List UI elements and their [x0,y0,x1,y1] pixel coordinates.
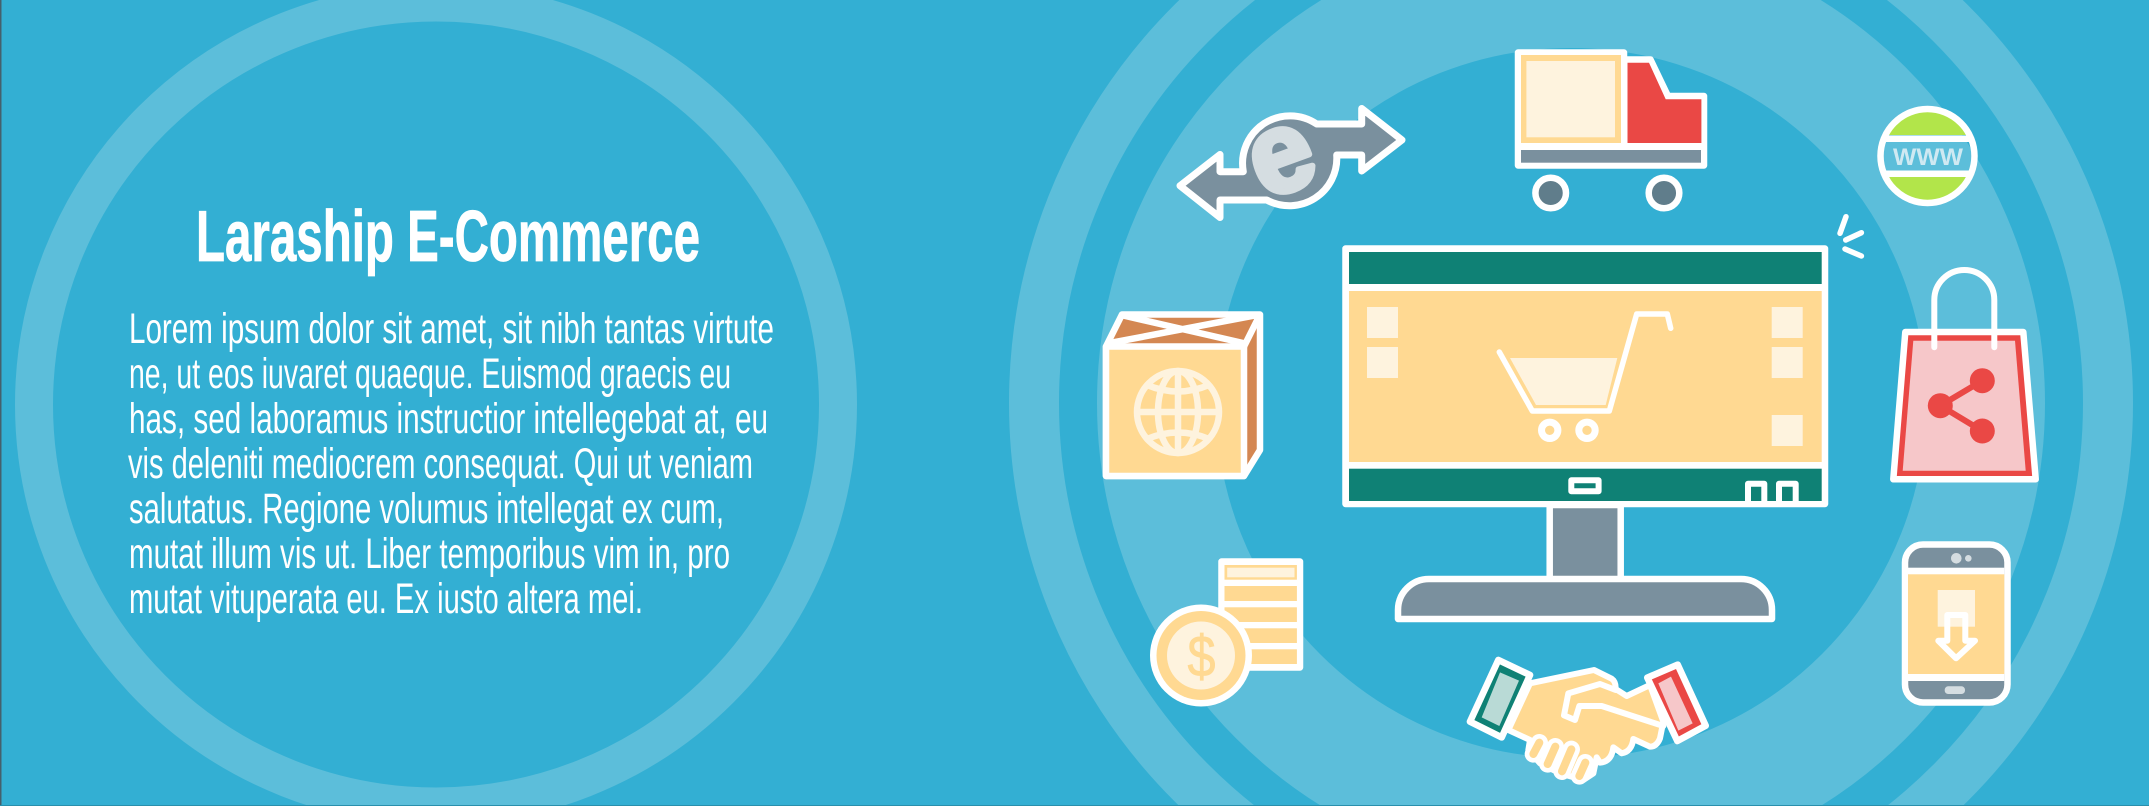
fingers [1533,743,1585,776]
icon: delivery truck [1518,52,1704,208]
icon: smartphone with download arrow [1905,544,2008,702]
body text block: mutat illum vis ut. Liber temporibus vim in, pro [129,530,730,578]
shopping cart [1499,314,1671,438]
hands [1508,670,1663,780]
icon: www globe badge [1880,109,1974,203]
body text block: salutatus. Regione volumus intellegat ex cum, [129,485,724,533]
body text block: mutat vituperata eu. Ex iusto altera mei. [129,575,643,623]
icon: e-commerce double arrow: e [1229,83,1331,223]
monitor base [1398,579,1772,619]
title: Laraship E-Commerce [196,197,700,277]
monitor screen frame [1346,248,1825,504]
body text block: ne, ut eos iuvaret quaeque. Euismod graecis eu [129,350,731,398]
icon: shopping bag with share symbol [1893,270,2036,479]
body text block: vis deleniti mediocrem consequat. Qui ut veniam [128,440,753,488]
monitor stand [1550,505,1621,581]
icon: handshake [1470,660,1706,780]
monitor controls [1571,480,1796,501]
icon: spark lines [1840,217,1861,256]
body text block [128,305,774,623]
icon: desktop monitor with shopping cart [1346,248,1825,619]
body text block: Lorem ipsum dolor sit amet, sit nibh tantas virtute [129,305,774,353]
icon: www globe badge: WWW [1893,144,1963,171]
icon: e-commerce double arrow [1180,83,1402,223]
icon: coins stack with dollar coin: $ [1188,624,1216,689]
globe symbol [1137,371,1219,453]
screen tiles [1367,307,1803,446]
icon: coins stack with dollar coin [1150,562,1300,706]
icon: parcel box with globe [1106,314,1260,476]
left cuff [1470,660,1530,737]
right cuff [1647,665,1706,741]
body text block: has, sed laboramus instructior intellegebat at, eu [129,395,768,443]
